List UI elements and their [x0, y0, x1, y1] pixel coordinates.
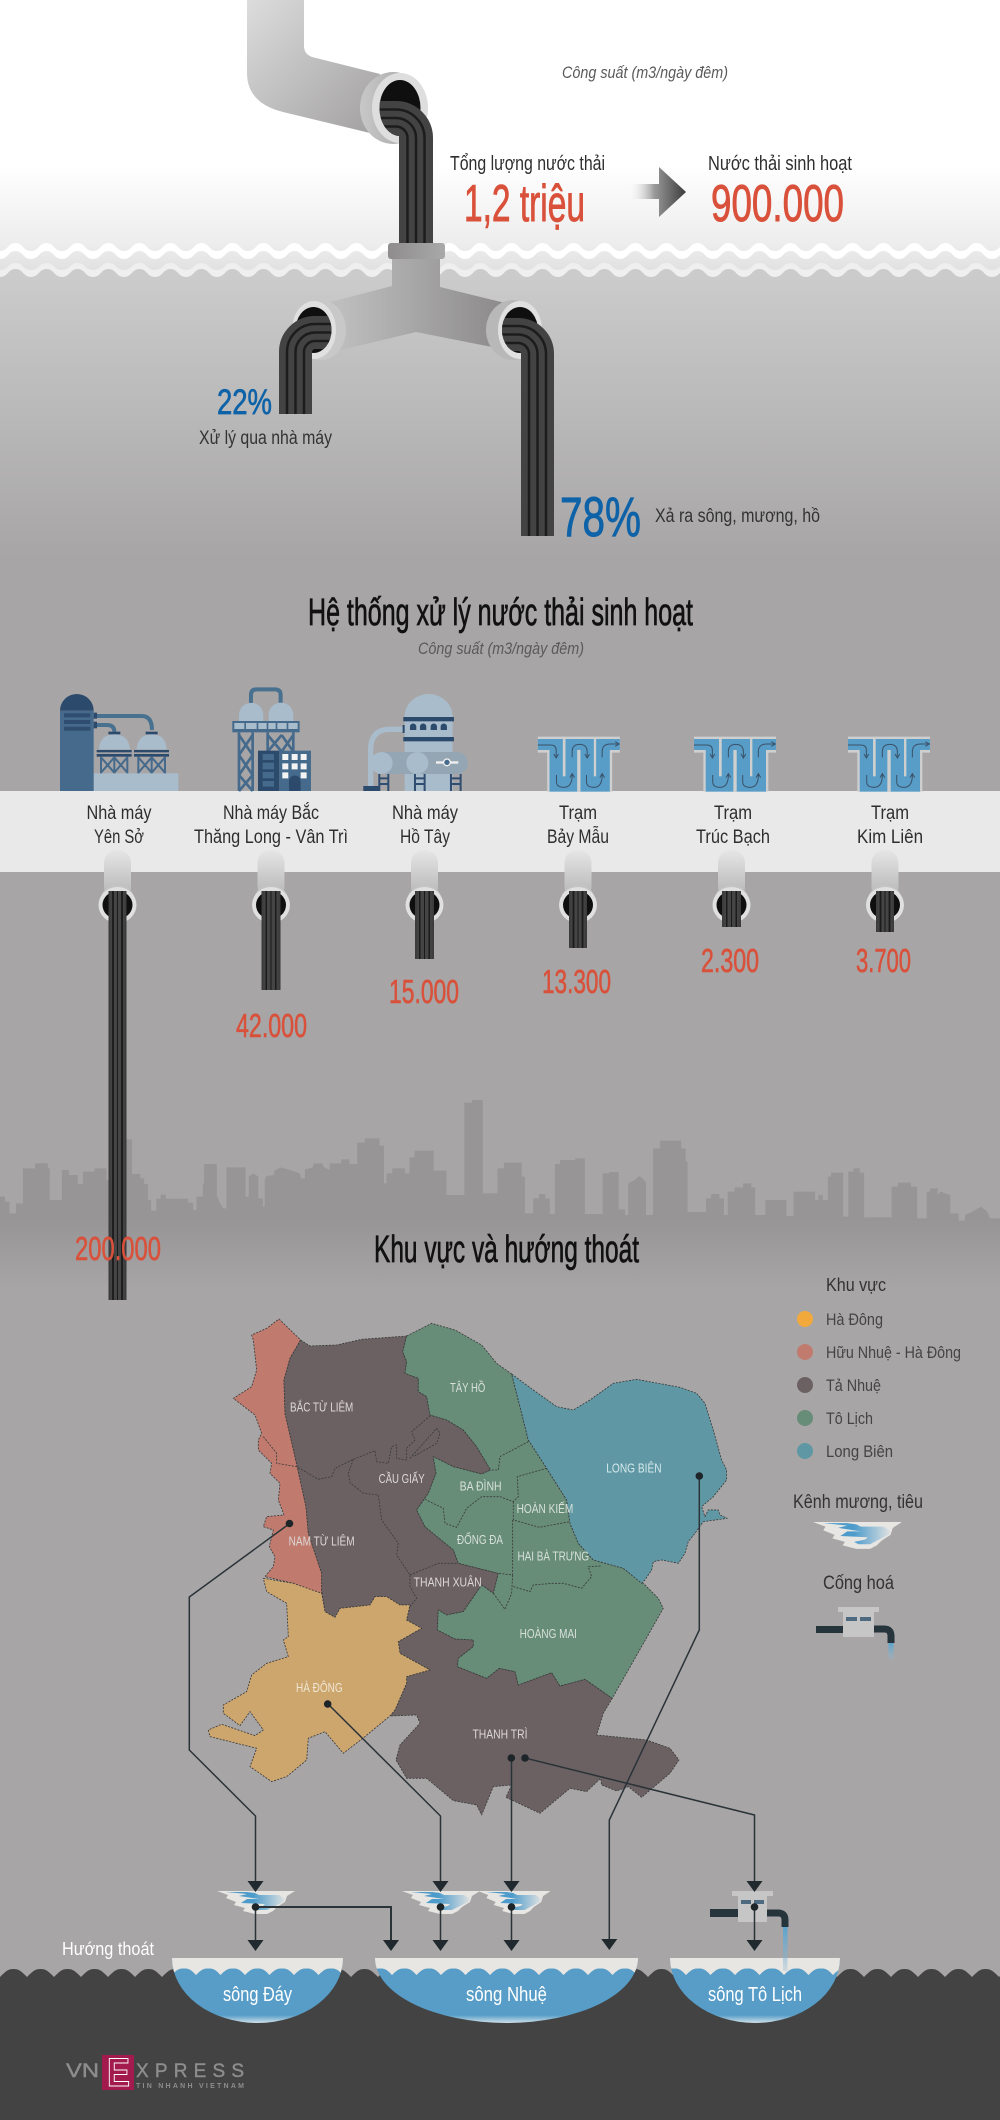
legend: culvert: Cống hoá — [823, 1573, 894, 1594]
pipe: Yen So — [98, 850, 136, 1300]
wastewater stream from main pipe — [370, 110, 424, 244]
flow arrowheads — [248, 1881, 762, 1951]
domestic wastewater block: Nước thải sinh hoạt — [708, 153, 852, 175]
icon: Yen So plant — [60, 694, 178, 791]
arrow — [628, 167, 686, 217]
background: white to grey — [0, 0, 1000, 290]
plant labels: Trạm — [714, 803, 752, 824]
region: Huu Nhue - Ha Dong — [233, 1319, 322, 1595]
heading: treatment system: Hệ thống xử lý nước thải sinh hoạt — [308, 592, 693, 634]
background: flat grey — [0, 556, 1000, 1976]
total wastewater block: Tổng lượng nước thải — [450, 153, 605, 175]
flow dots — [252, 1472, 758, 1911]
district names: THANH XUÂN — [414, 1574, 482, 1589]
plant labels: Nhà máy Bắc — [223, 802, 319, 824]
region: Long Bien — [512, 1374, 727, 1583]
icon: Bay Mau station — [538, 737, 620, 792]
heading: areas and drainage: Khu vực và hướng thoát — [374, 1229, 639, 1271]
river: Day — [172, 1958, 343, 2023]
district names: HAI BÀ TRƯNG — [517, 1548, 589, 1563]
plant labels: Nhà máy — [392, 803, 458, 824]
river: Day: sông Đáy — [223, 1984, 292, 2006]
district names: HOÀNG MAI — [520, 1626, 577, 1641]
region: Ha Dong — [208, 1578, 430, 1782]
river: Nhue: sông Nhuệ — [466, 1984, 547, 2006]
district names: BA ĐÌNH — [460, 1479, 502, 1494]
plant labels: Hồ Tây — [400, 827, 450, 848]
plant labels: Nhà máy — [86, 803, 152, 824]
district names: ĐỐNG ĐA — [457, 1532, 503, 1547]
district names: THANH TRÌ — [472, 1727, 527, 1742]
icon: Kim Lien station — [848, 737, 930, 792]
district names: HOÀN KIẾM — [517, 1501, 573, 1516]
domestic wastewater block: 900.000 — [711, 175, 844, 233]
district borders — [263, 1416, 602, 1609]
district names: LONG BIÊN — [606, 1460, 662, 1475]
region: To Lich — [403, 1323, 663, 1698]
plant labels: Yên Sở — [94, 827, 144, 848]
22% treated: Xử lý qua nhà máy — [199, 428, 332, 449]
logo: VnExpress — [66, 2051, 244, 2095]
22% treated — [199, 383, 332, 449]
label band — [0, 791, 1000, 872]
pipe: Bac Thang Long — [252, 850, 290, 990]
canal icons on map — [217, 1891, 551, 1914]
unit note: Công suất (m3/ngày đêm) — [418, 639, 584, 658]
logo: VnExpress: VN — [66, 2061, 99, 2082]
plant labels: Trạm — [559, 803, 597, 824]
district names: CẦU GIẤY — [379, 1471, 425, 1486]
legend: areas: Tả Nhuệ — [826, 1376, 881, 1395]
unit note top: Công suất (m3/ngày đêm) — [562, 63, 728, 82]
river: To Lich — [670, 1958, 840, 2023]
logo: VnExpress: TIN NHANH VIETNAM — [136, 2083, 244, 2090]
22% treated: 22% — [217, 383, 272, 422]
district names: BẮC TỪ LIÊM — [290, 1399, 353, 1414]
legend: areas: Khu vực — [826, 1275, 886, 1295]
logo: VnExpress: XPRESS — [136, 2061, 244, 2082]
78% discharged: Xả ra sông, mương, hồ — [655, 506, 820, 527]
capacity values: 200.000 — [75, 1230, 161, 1267]
plant labels: Thăng Long - Vân Trì — [194, 827, 348, 848]
capacity values: 13.300 — [542, 963, 611, 1000]
78% discharged — [560, 485, 820, 548]
dark ground — [0, 1969, 1000, 2120]
culvert icon on map — [710, 1891, 788, 1971]
domestic wastewater block — [708, 153, 852, 233]
background: grey lower section — [0, 278, 1000, 558]
plant labels — [86, 802, 923, 848]
plant labels: Bảy Mẫu — [547, 826, 609, 848]
icon: Truc Bach station — [694, 737, 776, 792]
legend: canal — [793, 1492, 923, 1549]
icon: Ho Tay plant — [363, 694, 468, 791]
icon: Bac Thang Long plant — [232, 689, 311, 791]
legend: areas: Hữu Nhuệ - Hà Đông — [826, 1343, 961, 1362]
district names: NAM TỪ LIÊM — [289, 1533, 355, 1548]
capacity values — [75, 942, 911, 1267]
capacity values: 2.300 — [701, 942, 759, 979]
pipe: Ho Tay — [406, 850, 444, 959]
legend: areas: Hà Đông — [826, 1310, 883, 1329]
district names — [289, 1380, 662, 1742]
skyline silhouette — [0, 1100, 1000, 1287]
plant labels: Kim Liên — [857, 827, 923, 848]
legend: areas — [797, 1275, 961, 1461]
plant labels: Trạm — [871, 803, 909, 824]
legend: canal: Kênh mương, tiêu — [793, 1492, 923, 1513]
region: Ta Nhue — [284, 1336, 679, 1815]
pipe: Bay Mau — [559, 850, 597, 948]
78% discharged: 78% — [560, 485, 641, 548]
wave bands — [0, 240, 1000, 280]
pipe: Kim Lien — [866, 850, 904, 932]
pipe: Truc Bach — [712, 850, 750, 927]
district names: HÀ ĐÔNG — [296, 1680, 343, 1695]
drainage flow lines — [189, 1476, 755, 1940]
total wastewater block: 1,2 triệu — [464, 175, 585, 233]
drainage direction label: Hướng thoát — [62, 1939, 154, 1959]
capacity values: 15.000 — [389, 973, 459, 1010]
legend: areas: Long Biên — [826, 1442, 893, 1461]
capacity values: 3.700 — [856, 942, 911, 979]
total wastewater block — [450, 153, 605, 233]
Y splitter pipe — [292, 243, 542, 360]
district names: TÂY HỒ — [450, 1380, 485, 1395]
map of Hanoi drainage areas — [208, 1319, 727, 1815]
legend: culvert — [816, 1573, 894, 1659]
stream: 22% branch — [287, 324, 345, 414]
plant labels: Trúc Bạch — [696, 827, 770, 848]
logo: VnExpress: E — [107, 2051, 130, 2095]
main pipe: inlet — [247, 0, 428, 144]
legend: areas: Tô Lịch — [826, 1409, 873, 1428]
capacity values: 42.000 — [236, 1007, 307, 1044]
river: Nhue — [375, 1958, 638, 2023]
stream: 78% branch — [490, 326, 546, 536]
river: To Lich: sông Tô Lịch — [708, 1984, 802, 2006]
